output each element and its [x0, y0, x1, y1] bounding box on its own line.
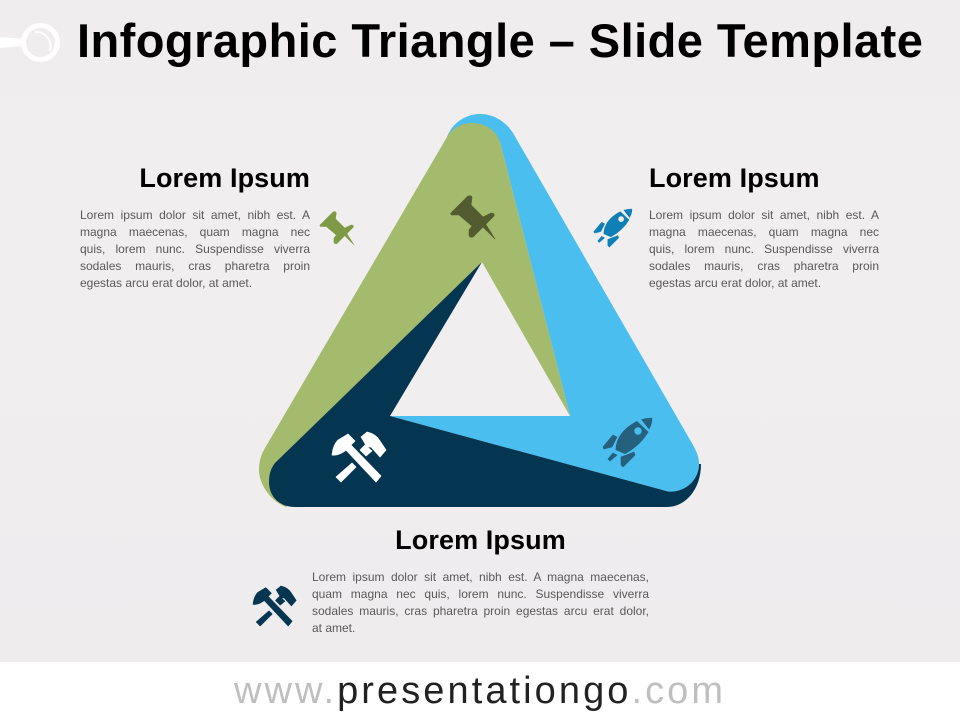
icon: crossed hammers on navy	[332, 432, 386, 482]
icon: pushpin left	[320, 212, 354, 245]
icon: pushpin on green	[451, 196, 495, 239]
heading right: Lorem Ipsum	[649, 163, 820, 193]
body bottom: quam magna nec quis, lorem nunc. Suspendisse viverra	[312, 587, 649, 601]
icon: rocket right	[594, 209, 632, 247]
body bottom: sodales mauris, cras pharetra proin egestas arcu erat dolor,	[312, 604, 649, 618]
segment: navy	[269, 262, 701, 507]
body right: sodales mauris, cras pharetra proin	[649, 259, 879, 273]
body left: quis, lorem nunc. Suspendisse viverra	[80, 242, 310, 256]
segment: green	[259, 123, 570, 507]
body bottom: Lorem ipsum dolor sit amet, nibh est. A magna maecenas,	[312, 570, 649, 584]
logo: ring with pointer	[0, 23, 60, 62]
segment: blue	[390, 114, 699, 492]
title: Infographic Triangle – Slide Template	[77, 14, 923, 67]
icon: rocket on blue	[603, 418, 652, 467]
panel: left text	[80, 163, 310, 290]
body bottom	[312, 570, 650, 635]
heading bottom: Lorem Ipsum	[395, 525, 566, 555]
body left	[80, 208, 310, 290]
body right: Lorem ipsum dolor sit amet, nibh est. A	[649, 208, 879, 222]
footer website: www.presentationgo.com	[234, 670, 726, 712]
panel: right text	[649, 163, 880, 290]
icon: crossed hammers bottom	[253, 586, 296, 626]
heading left: Lorem Ipsum	[139, 163, 310, 193]
body left: sodales mauris, cras pharetra proin	[80, 259, 310, 273]
body right: magna maecenas, quam magna nec	[649, 225, 879, 239]
body left: magna maecenas, quam magna nec	[80, 225, 310, 239]
body right	[649, 208, 880, 290]
panel: bottom text	[312, 525, 650, 635]
body left: Lorem ipsum dolor sit amet, nibh est. A	[80, 208, 310, 222]
body left: egestas arcu erat dolor, at amet.	[80, 276, 252, 290]
body bottom: at amet.	[312, 621, 355, 635]
body right: quis, lorem nunc. Suspendisse viverra	[649, 242, 879, 256]
body right: egestas arcu erat dolor, at amet.	[649, 276, 821, 290]
